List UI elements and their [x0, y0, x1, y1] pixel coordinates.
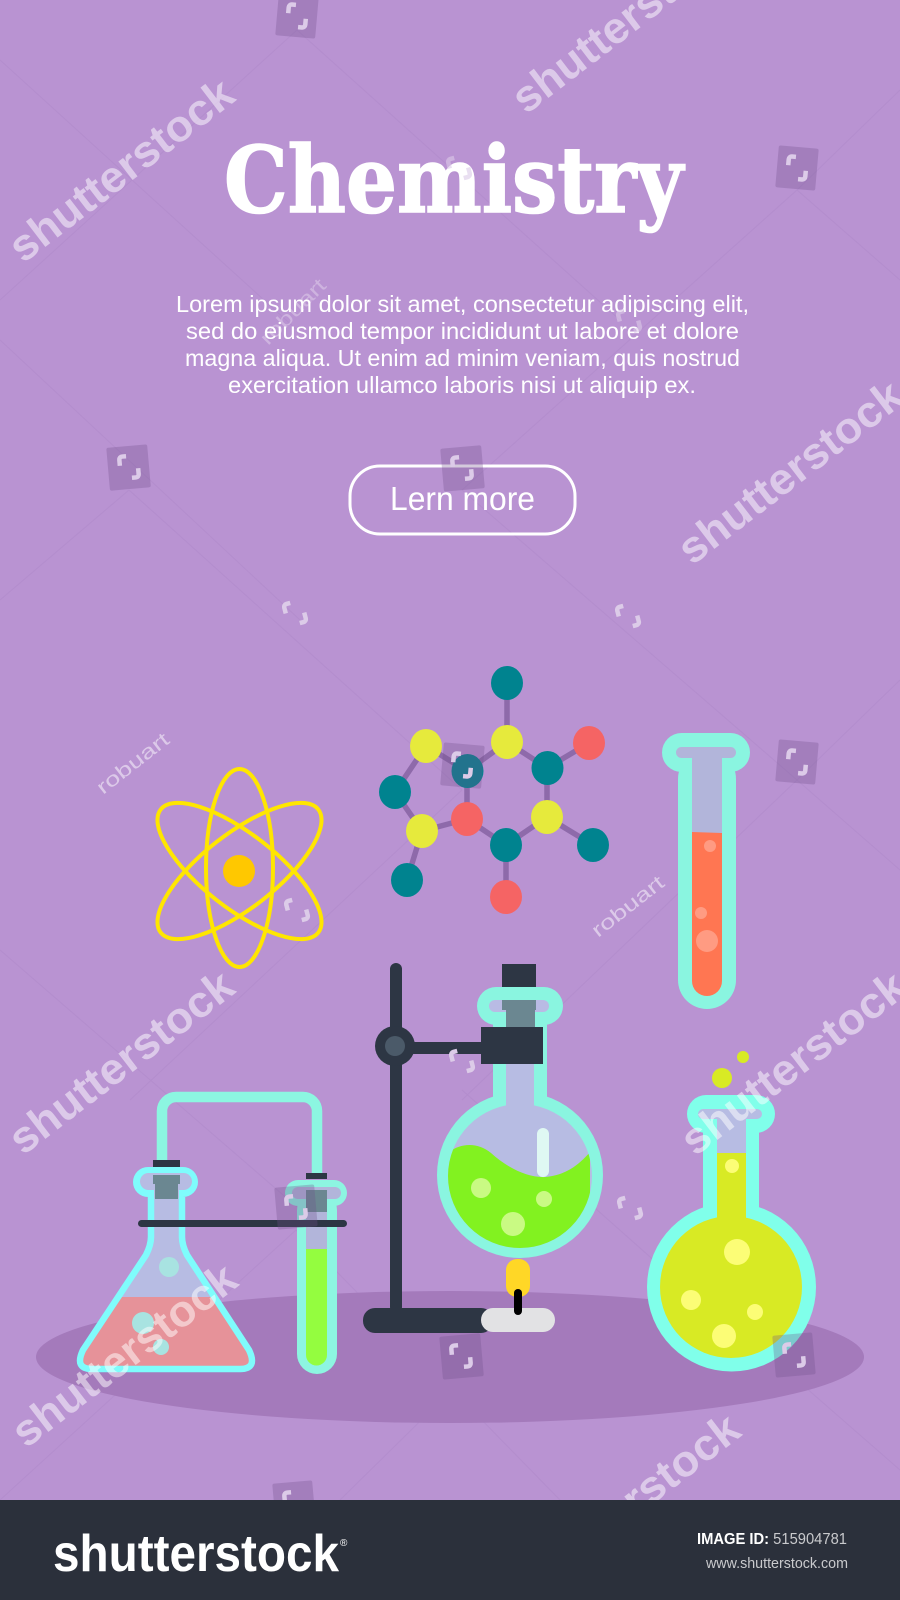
watermark: robuart text: robuart [256, 274, 331, 350]
footer bar [0, 1500, 900, 1600]
icon: orange test tube [662, 733, 750, 1009]
icon: connector tube [162, 1097, 317, 1174]
body text: magna aliqua. Ut enim ad minim veniam, quis nostrud [185, 345, 740, 371]
icon: molecule [379, 666, 609, 914]
watermark: robuart text [93, 274, 669, 942]
body text [176, 291, 749, 398]
footer logo: shutterstock [53, 1525, 339, 1583]
website url: www.shutterstock.com [705, 1555, 848, 1572]
icon: green test tube [285, 1173, 347, 1374]
body text: Lorem ipsum dolor sit amet, consectetur adipiscing elit, [176, 291, 749, 317]
icon: burner [481, 1259, 555, 1332]
body text: exercitation ullamco laboris nisi ut aliquip ex. [228, 372, 696, 398]
watermark: shutterstock text: shutterstock [2, 1253, 247, 1457]
watermark: shutterstock text: shutterstock [0, 68, 244, 272]
icon: conical flask [76, 1160, 256, 1372]
watermark: shutterstock text: shutterstock [0, 960, 244, 1164]
shadow ellipse [36, 1291, 864, 1423]
rack bar [138, 1220, 347, 1227]
icon: round flask with green liquid [437, 964, 603, 1260]
icon: retort stand [363, 963, 493, 1333]
watermark: square marks [106, 0, 819, 1526]
icon: round flask with yellow liquid [647, 1051, 816, 1372]
watermark: robuart text: robuart [588, 871, 669, 942]
title: Chemistry [224, 126, 685, 234]
button: learn more [350, 466, 575, 534]
body text: sed do eiusmod tempor incididunt ut labore et dolore [186, 318, 739, 344]
button: learn more: Lern more [390, 480, 535, 517]
registered mark: ® [340, 1538, 348, 1549]
icon: atom [138, 769, 341, 967]
image id: IMAGE ID: 515904781 [697, 1531, 847, 1548]
watermark: robuart text: robuart [93, 728, 174, 799]
